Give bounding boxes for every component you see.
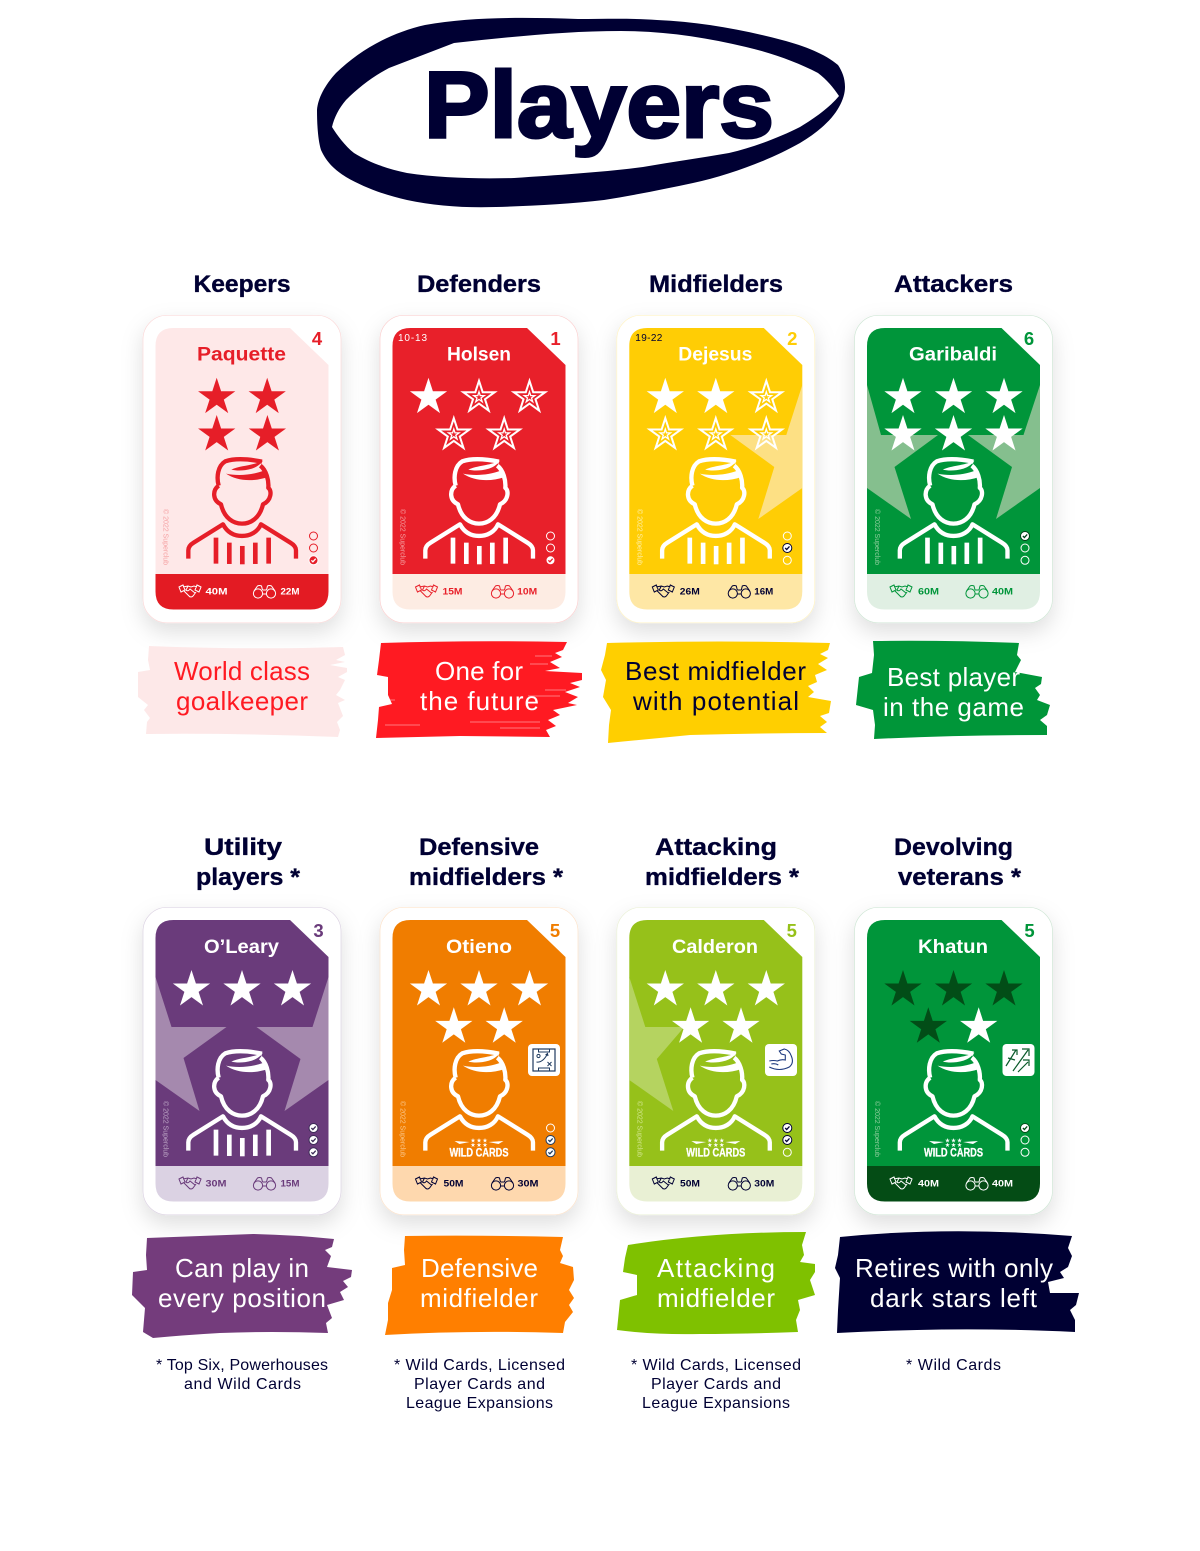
copyright: © 2022 Superclub [873, 509, 881, 565]
player name: Khatun [918, 937, 988, 958]
footnote: Defensive midfielders: * Wild Cards, Licensed [394, 1357, 565, 1374]
heading: Attackers: Attackers [894, 271, 1013, 298]
transfer values: 15M [280, 1178, 300, 1190]
transfer values [179, 1177, 300, 1190]
copyright: © 2022 Superclub [635, 1101, 643, 1157]
position checks [783, 1124, 792, 1156]
brush caption: Retires with only dark stars left: dark stars left [870, 1283, 1038, 1313]
star rating [410, 970, 548, 1043]
player name: Paquette [197, 344, 286, 366]
transfer values [416, 585, 537, 598]
transfer values: 30M [206, 1178, 227, 1190]
transfer values [179, 585, 300, 598]
footnote: Defensive midfielders: League Expansions [406, 1395, 553, 1412]
transfer values: 15M [442, 586, 463, 598]
brush caption: Best player in the game: Best player [887, 662, 1020, 692]
brush caption: One for the future [376, 641, 582, 738]
transfer values [652, 585, 773, 598]
copyright: © 2022 Superclub [162, 1101, 170, 1157]
star rating [647, 378, 782, 448]
transfer values: 22M [280, 586, 300, 598]
brush caption: Defensive midfielder [385, 1236, 574, 1335]
star rating [410, 378, 545, 448]
card number: 1 [550, 328, 561, 349]
transfer values: 30M [754, 1178, 774, 1190]
transfer values: 50M [444, 1178, 464, 1190]
player figure [662, 1051, 770, 1151]
star rating [884, 378, 1023, 450]
player figure [900, 459, 1007, 564]
wild cards crest [686, 1138, 746, 1160]
heading: Defensive midfielders [409, 834, 564, 891]
copyright: © 2022 Superclub [873, 1101, 881, 1157]
position checks [546, 532, 555, 565]
card number: 6 [1024, 328, 1034, 349]
brush caption: Can play in every position [132, 1234, 352, 1338]
brush caption: Attacking midfielder [617, 1232, 815, 1334]
footnote: Utility players: * Top Six, Powerhouses [156, 1357, 328, 1374]
heading: Defenders: Defenders [417, 271, 541, 298]
brush caption: Best midfielder with potential [601, 642, 831, 743]
card: Holsen [380, 315, 578, 623]
player name: Garibaldi [909, 344, 997, 366]
brush caption: Attacking midfielder: midfielder [657, 1283, 775, 1313]
heading: Utility players [196, 834, 301, 891]
brush caption: Best midfielder with potential: Best midfielder [625, 656, 806, 686]
icon: tactics board [528, 1044, 560, 1076]
icon: attacking arrows [1002, 1044, 1034, 1076]
position checks [546, 1124, 555, 1157]
heading: Attacking midfielders: midfielders * [645, 864, 800, 891]
title: Players in a hand-drawn ellipse [317, 18, 845, 207]
brush caption: Defensive midfielder: Defensive [421, 1253, 538, 1283]
transfer values: 40M [992, 586, 1013, 598]
background star shape [730, 385, 802, 519]
heading: Defensive midfielders: midfielders * [409, 864, 564, 891]
background star shape [156, 977, 328, 1111]
heading: Devolving veterans: Devolving [894, 834, 1013, 861]
star rating [647, 970, 785, 1043]
card number: 3 [313, 920, 324, 941]
transfer values: 26M [680, 586, 700, 598]
transfer values: 40M [206, 586, 228, 598]
brush caption: Can play in every position: Can play in [175, 1253, 309, 1283]
player name: Otieno [446, 937, 512, 958]
footnote: Attacking midfielders [631, 1357, 801, 1412]
position checks [309, 532, 318, 565]
brush caption: Can play in every position: every position [158, 1283, 326, 1313]
icon: flexed arm [765, 1044, 797, 1076]
card: O'Leary [143, 907, 341, 1215]
card number: 2 [787, 328, 797, 349]
transfer values: 50M [680, 1178, 700, 1190]
heading: Keepers: Keepers [194, 271, 290, 298]
brush caption: Defensive midfielder: midfielder [420, 1283, 538, 1313]
card number: 5 [550, 920, 560, 941]
transfer values: 16M [754, 586, 773, 598]
position checks [309, 1124, 318, 1157]
card number: 4 [312, 328, 323, 349]
footnote: Devolving veterans: * Wild Cards [906, 1357, 1001, 1374]
brush caption: Retires with only dark stars left [835, 1231, 1079, 1333]
copyright: © 2022 Superclub [162, 509, 170, 565]
transfer values [416, 1177, 539, 1190]
brush caption: World class goalkeeper: goalkeeper [176, 686, 308, 716]
transfer values: 60M [918, 586, 939, 598]
copyright: © 2022 Superclub [398, 1101, 406, 1157]
footnote: Attacking midfielders: League Expansions [642, 1395, 790, 1412]
wild cards crest: WILD CARDS [450, 1148, 509, 1160]
copyright: © 2022 Superclub [398, 509, 406, 565]
brush caption: Best player in the game [856, 641, 1050, 739]
player name: Holsen [447, 344, 511, 366]
card: Garibaldi [854, 315, 1052, 623]
heading: Utility players: players * [196, 864, 301, 891]
wild cards crest: WILD CARDS [686, 1148, 746, 1160]
card number: 5 [1024, 920, 1035, 941]
card number: 5 [787, 920, 797, 941]
age range: 19-22 [635, 333, 663, 344]
background star shape [867, 385, 1040, 519]
brush caption: Best player in the game: in the game [883, 692, 1024, 722]
transfer values [890, 1177, 1013, 1190]
transfer values: 40M [918, 1178, 939, 1190]
title text: Players [424, 52, 774, 157]
player name: Calderon [672, 937, 758, 958]
star rating [198, 378, 286, 450]
copyright: © 2022 Superclub [635, 509, 643, 565]
footnote: Utility players [156, 1357, 328, 1393]
heading: Midfielders: Midfielders [649, 271, 783, 298]
brush caption: World class goalkeeper: World class [174, 656, 310, 686]
player figure [425, 1051, 533, 1151]
background star shape [629, 977, 684, 1111]
brush caption: World class goalkeeper [138, 646, 347, 737]
footnote: Defensive midfielders: Player Cards and [414, 1376, 545, 1393]
transfer values: 10M [517, 586, 537, 598]
star rating [173, 970, 311, 1005]
transfer values: 40M [992, 1178, 1013, 1190]
card: Paquette [143, 315, 341, 623]
position checks [783, 532, 792, 564]
heading: Utility players: Utility [204, 834, 283, 861]
footnote: Defensive midfielders [394, 1357, 565, 1412]
player figure [425, 459, 533, 564]
position checks [1020, 532, 1030, 564]
brush caption: Best midfielder with potential: with potential [632, 686, 799, 716]
age range: 10-13 [398, 333, 427, 344]
wild cards crest [924, 1138, 983, 1160]
wild cards crest [450, 1138, 509, 1160]
heading: Devolving veterans: veterans * [898, 864, 1022, 891]
player figure [188, 1051, 296, 1156]
brush caption: Retires with only dark stars left: Retires with only [855, 1253, 1053, 1283]
player figure [900, 1051, 1007, 1151]
transfer values [890, 585, 1013, 598]
wild cards crest: WILD CARDS [924, 1148, 983, 1160]
card: Khatun [854, 907, 1052, 1215]
footnote: Attacking midfielders: Player Cards and [651, 1376, 781, 1393]
footnote: Attacking midfielders: * Wild Cards, Licensed [631, 1357, 801, 1374]
footnote: Utility players: and Wild Cards [184, 1376, 301, 1393]
star rating [884, 970, 1023, 1043]
brush caption: One for the future: the future [420, 686, 539, 716]
card: Calderon [617, 907, 815, 1215]
transfer values: 30M [518, 1178, 539, 1190]
heading: Attacking midfielders [645, 834, 800, 891]
heading: Devolving veterans [894, 834, 1022, 891]
card: Otieno [380, 907, 578, 1215]
position checks [1020, 1124, 1030, 1156]
player name: Dejesus [678, 344, 752, 366]
player figure [662, 459, 770, 564]
ellipse scribble [317, 18, 845, 207]
player name: O’Leary [204, 937, 279, 958]
brush caption: One for the future: One for [435, 656, 523, 686]
heading: Defensive midfielders: Defensive [419, 834, 539, 861]
heading: Attacking midfielders: Attacking [655, 834, 777, 861]
card: Dejesus [617, 315, 815, 623]
brush caption: Attacking midfielder: Attacking [657, 1253, 775, 1283]
transfer values [652, 1177, 774, 1190]
player figure [188, 459, 296, 564]
